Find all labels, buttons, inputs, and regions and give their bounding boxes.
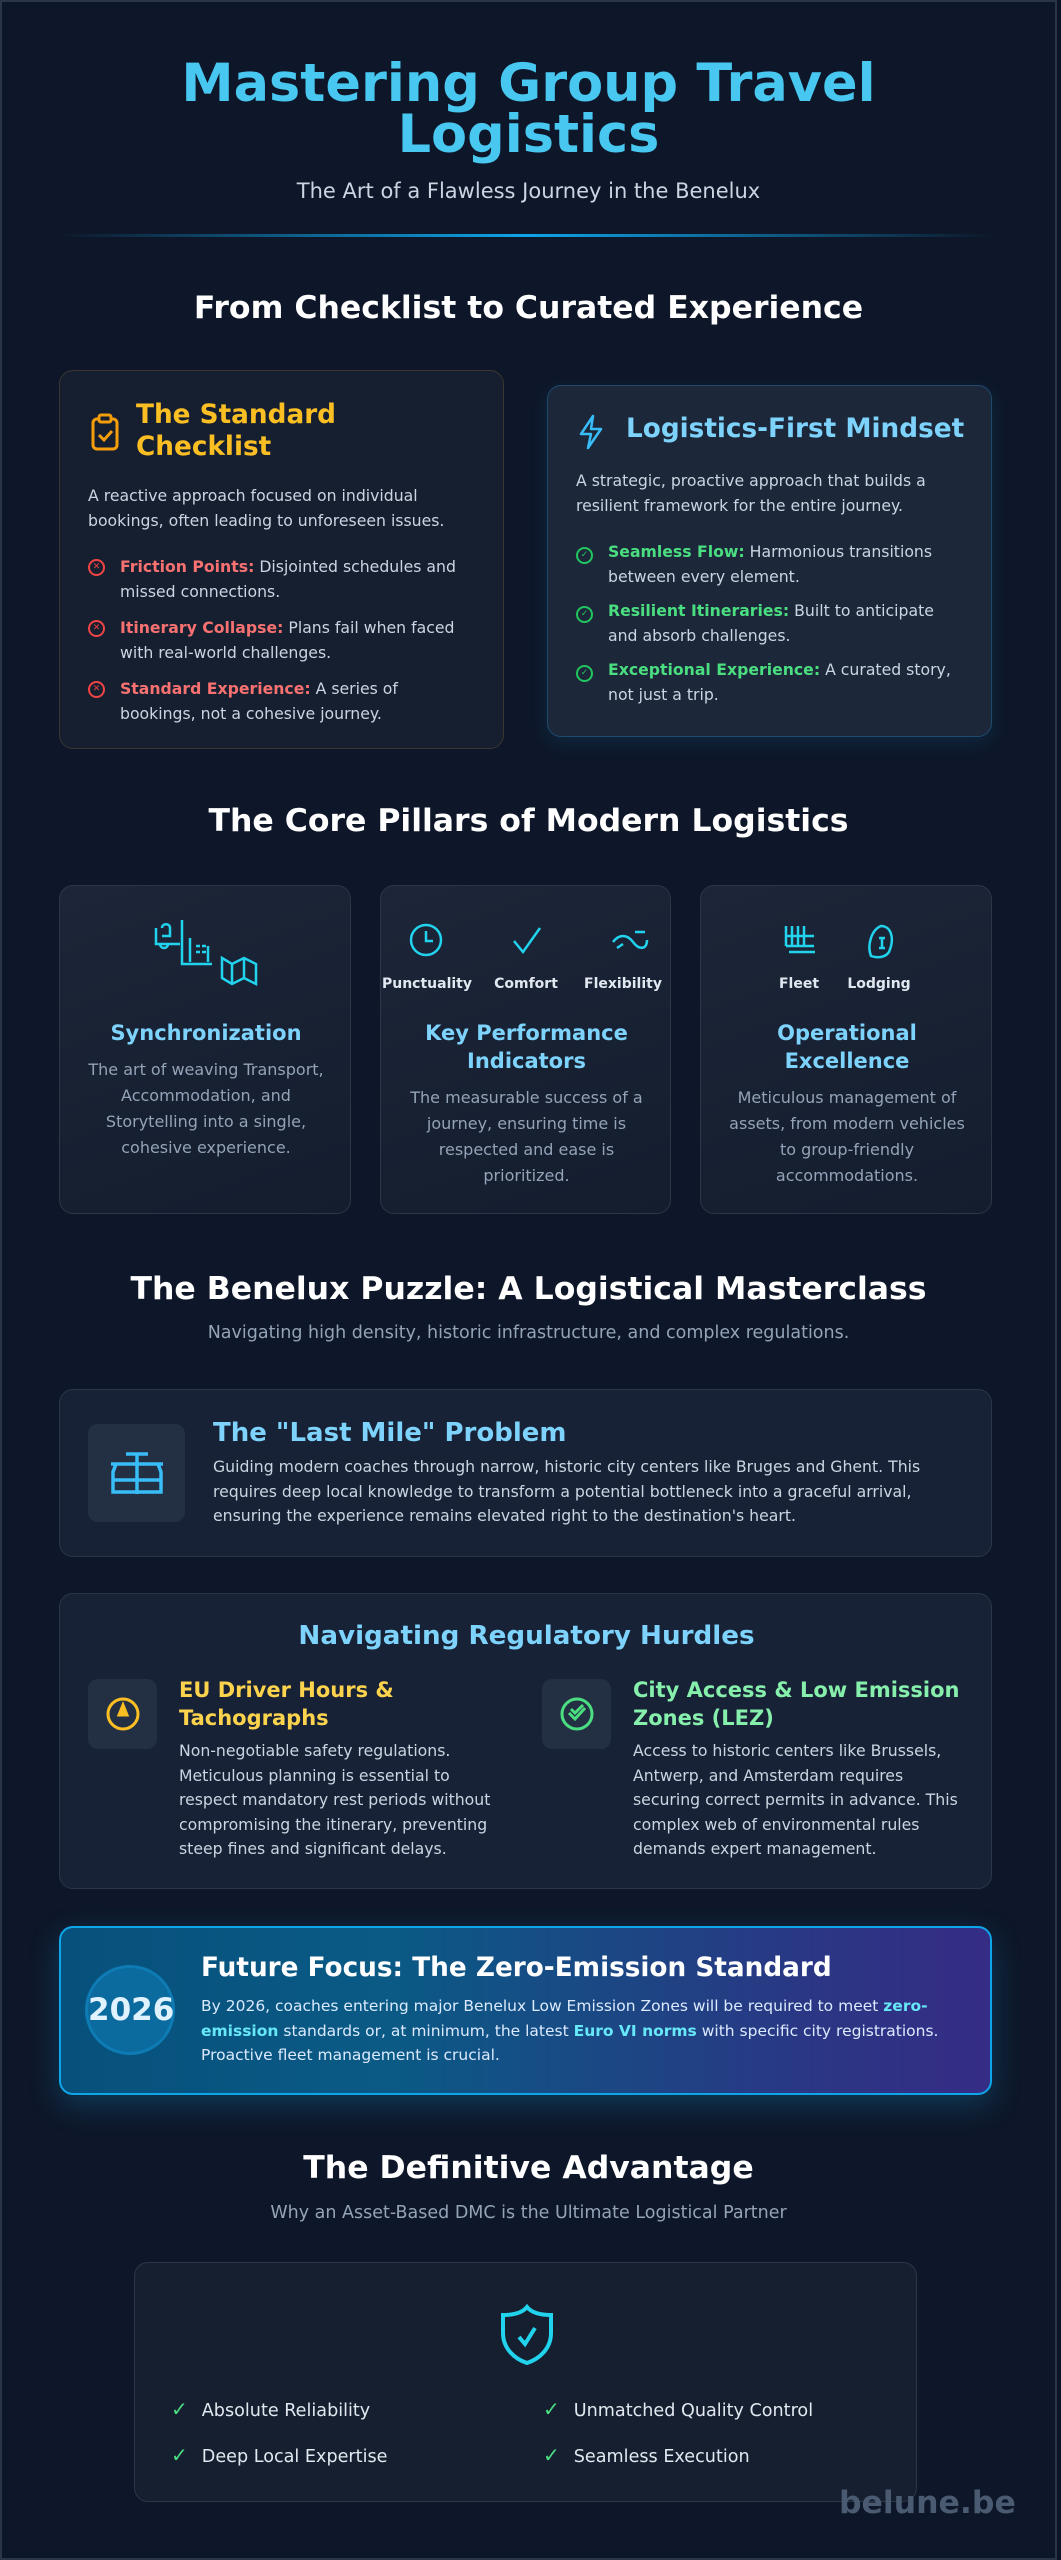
- badge: 2026: 2026: [88, 1992, 174, 2028]
- item: EU driver hours: [88, 1678, 490, 1858]
- item: LEZ: Zones (LEZ): [633, 1706, 774, 1730]
- title: Indicators: [467, 1049, 586, 1073]
- heading: benelux puzzle: The Benelux Puzzle: A Logistical Masterclass: [130, 1271, 927, 1307]
- icon: lightning: [580, 414, 602, 450]
- icons: fleet & lodging: Lodging: [847, 976, 911, 992]
- text: A strategic, proactive approach that builds a resilient framework for the entire journey.: [576, 471, 926, 515]
- item: LEZ: [542, 1678, 960, 1858]
- icons: KPI set: Comfort: [494, 976, 558, 992]
- subtitle: The Art of a Flawless Journey in the Benelux: [297, 179, 760, 203]
- item: EU driver hours: Non-negotiable safety regulations. Meticulous planning is essential to respect mandatory rest periods without compromising the itinerary, preventing steep fines and significant delays.: [179, 1741, 490, 1858]
- item: EU driver hours: Tachographs: [179, 1706, 329, 1730]
- icon: tachograph: [88, 1679, 157, 1749]
- item: EU driver hours: EU Driver Hours &: [179, 1678, 394, 1702]
- panel: logistics-first: Seamless Flow: Harmonious transitions between every element.: [608, 542, 932, 586]
- title: Operational: [777, 1021, 917, 1045]
- panel: logistics-first: ✓: [581, 668, 588, 678]
- text: A reactive approach focused on individual bookings, often leading to unforeseen issues.: [88, 486, 444, 530]
- icon: coach box: [88, 1424, 185, 1522]
- panel: logistics-first: [547, 385, 992, 737]
- text: The art of weaving Transport, Accommodation, and Storytelling into a single, cohesive experience.: [88, 1060, 324, 1157]
- panel: standard checklist: ✕: [93, 684, 100, 694]
- panel: logistics-first: Exceptional Experience: A curated story, not just a trip.: [608, 660, 951, 704]
- heading: core pillars: The Core Pillars of Modern Logistics: [208, 803, 849, 839]
- text: Meticulous management of assets, from modern vehicles to group-friendly accommodations.: [729, 1088, 965, 1185]
- title: Mastering Group Travel: [181, 53, 876, 114]
- heading: Logistics-First Mindset: [626, 414, 964, 444]
- title: Synchronization: [110, 1021, 302, 1045]
- text: By 2026, coaches entering major Benelux Low Emission Zones will be required to meet zero-emission standards or, at minimum, the latest Euro VI norms with specific city registrations. Proactive fleet management is crucial.: [201, 1997, 938, 2064]
- list: advantages: [171, 2397, 813, 2467]
- panel: KPIs: [380, 885, 671, 1214]
- heading: The Standard: [136, 400, 336, 430]
- heading: definitive advantage: The Definitive Advantage: [303, 2150, 754, 2186]
- icons: fleet & lodging: [779, 924, 911, 992]
- heading: Navigating Regulatory Hurdles: [298, 1621, 755, 1651]
- heading: from checklist: From Checklist to Curated Experience: [194, 290, 863, 326]
- panel: logistics-first: Resilient Itineraries: Built to anticipate and absorb challenges.: [608, 601, 934, 645]
- title: The "Last Mile" Problem: [213, 1418, 566, 1448]
- panel: standard checklist: ✕: [93, 562, 100, 572]
- heading: Checklist: [136, 432, 271, 462]
- list: advantages: ✓ Deep Local Expertise: [171, 2443, 387, 2467]
- panel: regulatory hurdles: [59, 1593, 992, 1889]
- text: The measurable success of a journey, ensuring time is respected and ease is prioritized.: [410, 1088, 643, 1185]
- bullet list: [88, 557, 456, 723]
- panel: synchronization: [59, 885, 351, 1214]
- item: LEZ: Access to historic centers like Brussels, Antwerp, and Amsterdam requires securing correct permits in advance. This complex web of environmental rules demands expert management.: [633, 1741, 958, 1858]
- panel: last mile: [59, 1389, 992, 1557]
- panel: logistics-first: ✓: [581, 550, 588, 560]
- title: Logistics: [398, 104, 659, 165]
- icon: check badge: [542, 1679, 611, 1749]
- list: advantages: ✓ Absolute Reliability: [171, 2397, 370, 2421]
- panel: logistics-first: ✓: [581, 609, 588, 619]
- title: Future Focus: The Zero-Emission Standard: [201, 1953, 832, 1983]
- panel: advantages: [134, 2262, 917, 2502]
- badge: 2026: [85, 1965, 175, 2055]
- title: [181, 53, 876, 165]
- panel: standard checklist: [59, 370, 504, 749]
- list: advantages: ✓ Seamless Execution: [543, 2443, 750, 2467]
- icons: fleet & lodging: Fleet: [779, 976, 819, 992]
- heading: [136, 400, 336, 462]
- subheading: Navigating high density, historic infrastructure, and complex regulations.: [208, 1323, 849, 1343]
- icons: KPI set: Flexibility: [584, 976, 662, 992]
- panel: operational excellence: [700, 885, 992, 1214]
- watermark: belune.be: [839, 2485, 1016, 2521]
- title: [425, 1021, 628, 1073]
- panel: future focus: [59, 1926, 992, 2095]
- icon: transport/city/map: [154, 920, 258, 986]
- panel: standard checklist: ✕: [93, 623, 100, 633]
- title: Excellence: [785, 1049, 909, 1073]
- icons: KPI set: Punctuality: [382, 976, 472, 992]
- subheading: Why an Asset-Based DMC is the Ultimate Logistical Partner: [270, 2203, 787, 2223]
- panel: standard checklist: Standard Experience: A series of bookings, not a cohesive journey.: [120, 679, 398, 723]
- icon: shield: [501, 2304, 553, 2366]
- panel: standard checklist: Itinerary Collapse: Plans fail when faced with real-world challenges.: [120, 618, 454, 662]
- icon: clipboard: [92, 414, 118, 450]
- icons: KPI set: [382, 924, 662, 992]
- title: [777, 1021, 917, 1073]
- panel: standard checklist: Friction Points: Disjointed schedules and missed connections.: [120, 557, 456, 601]
- item: LEZ: City Access & Low Emission: [633, 1678, 960, 1702]
- text: Guiding modern coaches through narrow, historic city centers like Bruges and Ghent. This requires deep local knowledge to transform a potential bottleneck into a graceful arrival, ensuring the experience remains elevated right to the destination's heart.: [213, 1457, 920, 1525]
- title: Key Performance: [425, 1021, 628, 1045]
- list: advantages: ✓ Unmatched Quality Control: [543, 2397, 813, 2421]
